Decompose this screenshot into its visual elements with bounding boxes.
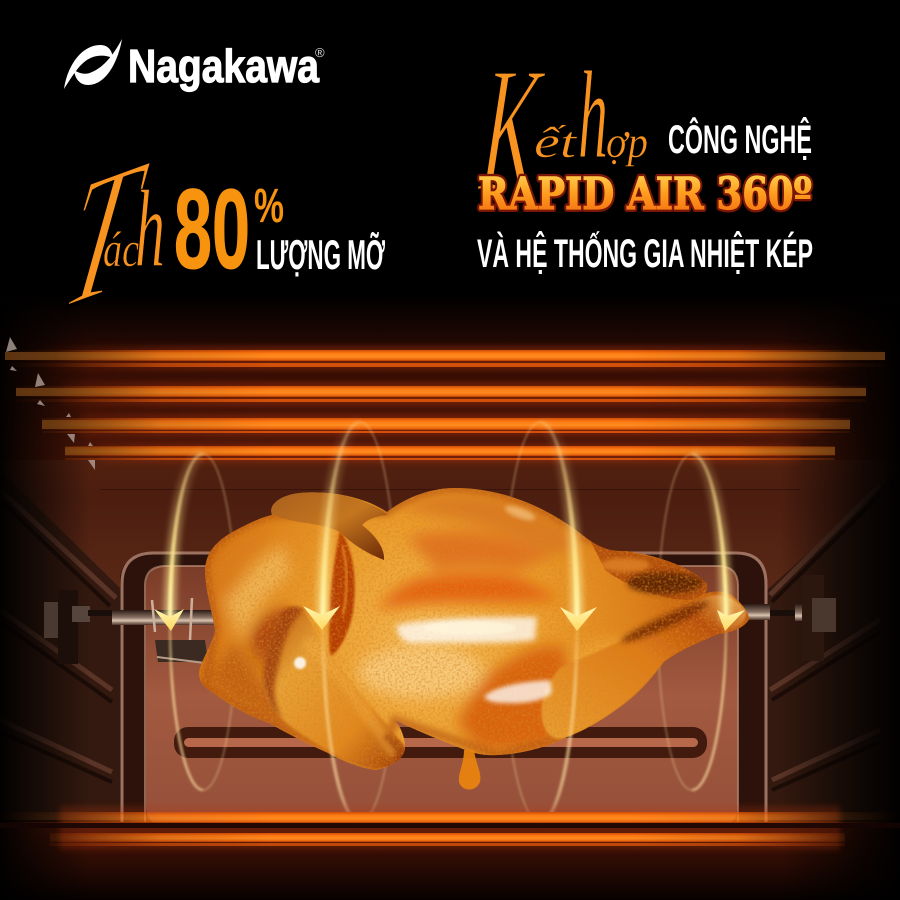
percent: % [254, 180, 284, 233]
rapid air text: RAPID AIR 360º [478, 169, 812, 220]
outer rim shading [205, 488, 749, 770]
right leg [541, 595, 746, 739]
arrow 2 [303, 606, 340, 630]
ring 3 [540, 422, 577, 822]
upper back wall [0, 460, 900, 590]
right wing [590, 540, 707, 600]
dark red seam [329, 530, 355, 657]
script heading: ết [534, 118, 578, 167]
back wall panel [120, 552, 767, 827]
texture [190, 480, 760, 780]
headline right [474, 31, 813, 276]
logo icon [64, 39, 122, 89]
registered mark: ® [315, 45, 325, 60]
rapid air glow: RAPID AIR 360º [478, 169, 812, 220]
spit bar left [112, 610, 222, 625]
airflow rings behind chicken [170, 422, 726, 822]
script heading: K [474, 31, 549, 230]
fork left [152, 598, 192, 640]
script heading: h [578, 47, 608, 185]
brand name: Nagakawa [128, 40, 319, 92]
rod end clips [6, 337, 95, 470]
left bracket [44, 602, 68, 638]
big number: 80 [174, 166, 250, 292]
headline left: ác [103, 221, 139, 277]
bottom rod 1 [0, 812, 900, 823]
breast highlight [397, 617, 537, 643]
drumstick [263, 607, 407, 768]
rod glow [60, 806, 840, 850]
bottom rod 2 [50, 833, 845, 846]
arrow 4 [717, 610, 745, 631]
heating rod 2 [16, 386, 866, 402]
edge shadows [0, 300, 90, 900]
top wing [271, 492, 388, 560]
heating rod 4 [65, 446, 835, 460]
spit bar right [600, 606, 740, 620]
chicken body [199, 488, 749, 770]
thigh highlight [484, 680, 552, 703]
ring 2 [323, 422, 360, 822]
ring 4 [692, 454, 726, 790]
chicken [190, 480, 760, 790]
rod glow [40, 346, 860, 463]
fat drop [459, 750, 480, 790]
arrow 1 [154, 609, 184, 631]
skin shading [205, 494, 652, 750]
airflow rings in front of chicken [170, 422, 726, 822]
script heading [474, 31, 648, 230]
top heating rods [5, 346, 885, 463]
headline left [50, 116, 385, 351]
bottom heating rods [0, 806, 900, 850]
rail highlights [122, 553, 766, 826]
rod ends underlay [5, 352, 885, 455]
airflow arrowheads [154, 606, 745, 631]
heating rod 3 [42, 418, 850, 433]
arrow 3 [560, 607, 597, 631]
rotisserie spit [44, 575, 836, 664]
floor [0, 822, 900, 900]
fat label: LƯỢNG MỠ [256, 230, 385, 278]
oven interior [0, 295, 900, 900]
headline left: h [135, 168, 165, 290]
heating rod 1 [5, 350, 885, 367]
script word: T [50, 116, 160, 351]
ring 1 [170, 454, 203, 790]
side wall base [0, 460, 900, 820]
logo [64, 39, 325, 92]
slot in back wall [174, 727, 707, 758]
right bracket [802, 575, 824, 661]
oven ceiling [0, 295, 900, 465]
script heading: ợp [606, 118, 648, 167]
